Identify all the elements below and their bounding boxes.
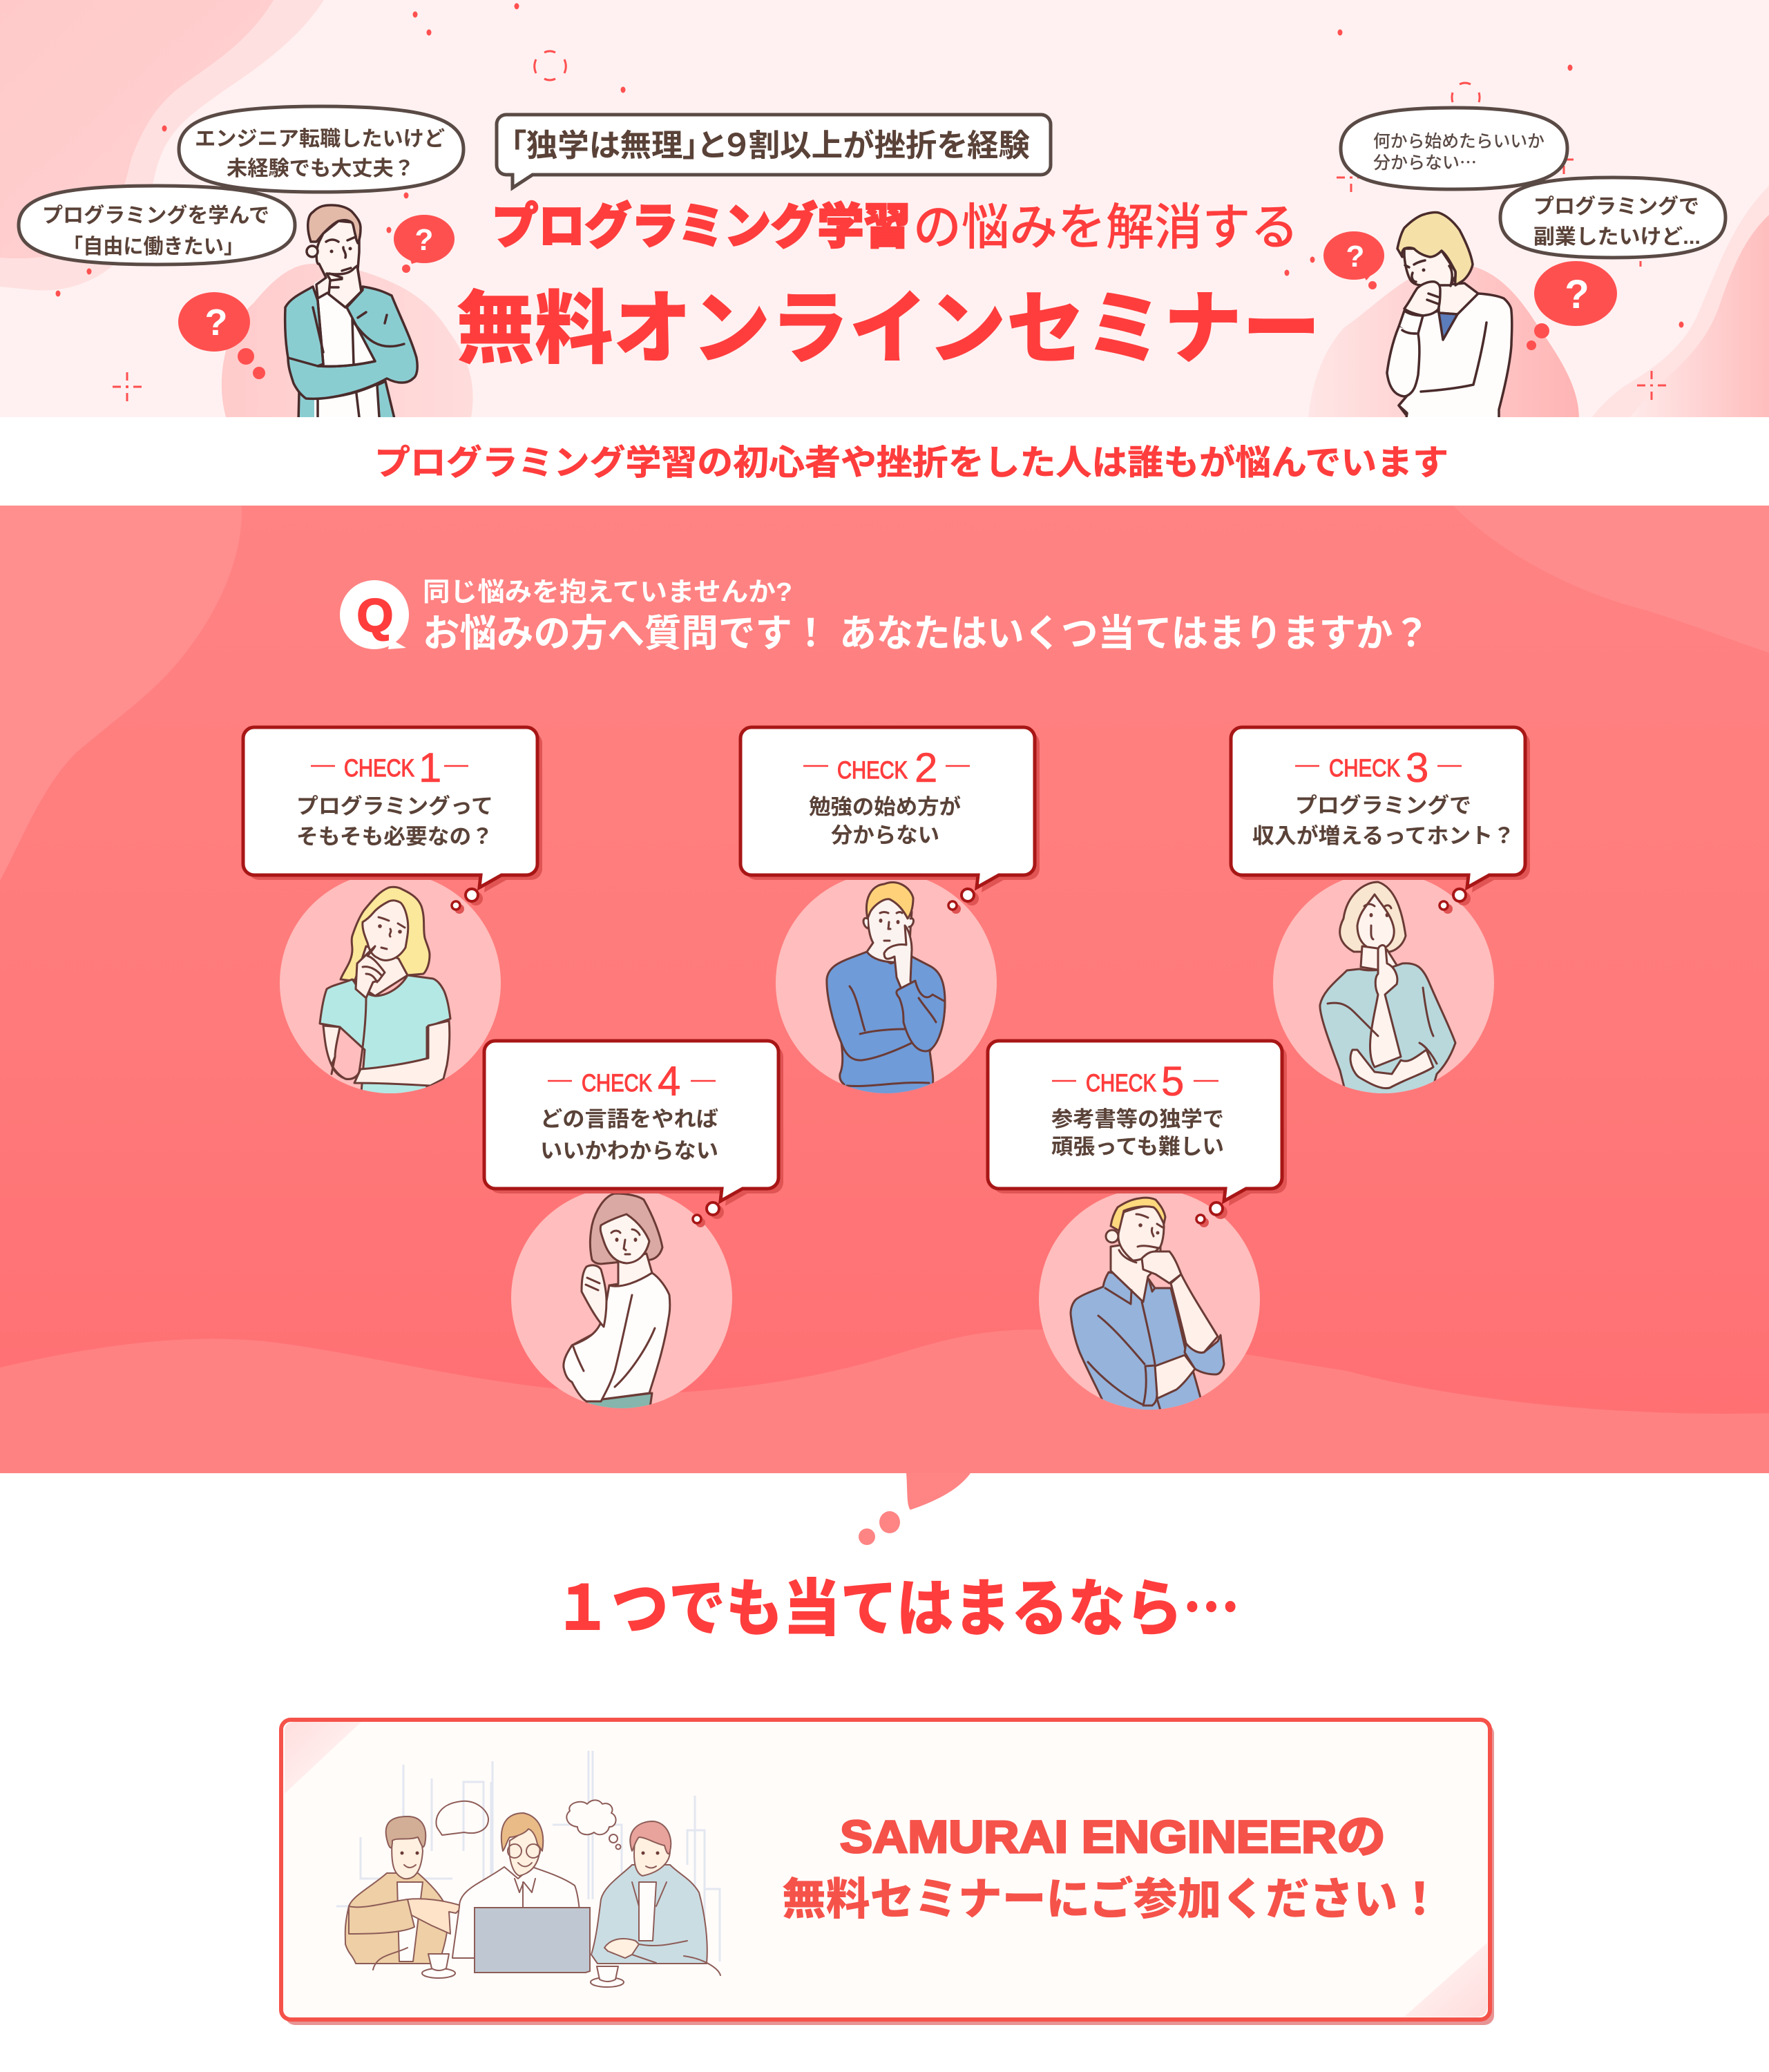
- callout: over 90 percent experienced frustration: [497, 115, 1051, 188]
- heading: question header: [340, 578, 1430, 655]
- check card 3: 3: [1406, 745, 1428, 791]
- circle: check 4 person background: [511, 1187, 732, 1408]
- check card 1: プログラミングって: [296, 794, 493, 818]
- callout: over 90 percent experienced frustration: 「独学は無理」と９割以上が挫折を経験: [510, 120, 1030, 165]
- check card 2: CHECK: [837, 757, 908, 784]
- check card 2: [740, 727, 1040, 914]
- speech bubble: work freely: 「自由に働きたい」: [63, 236, 244, 258]
- illustration: man in blue sweater: [827, 883, 945, 1098]
- check card 3: [1231, 727, 1530, 914]
- text: samurai engineer invitation: 無料セミナーにご参加ください！: [782, 1874, 1442, 1924]
- check card 1: [243, 727, 542, 914]
- circle: check 2 person background: [776, 872, 997, 1093]
- check card 1: そもそも必要なの？: [296, 825, 493, 849]
- person: middle in white shirt: [452, 1813, 584, 1958]
- cup right: [591, 1966, 624, 1987]
- speech bubble: side job: 副業したいけど...: [1533, 226, 1701, 249]
- text: samurai engineer invitation: SAMURAI ENGINEERの: [840, 1811, 1386, 1862]
- check card 2: 2: [915, 745, 937, 791]
- check card 5: 参考書等の独学で: [1051, 1107, 1224, 1131]
- heading: question header: 同じ悩みを抱えていませんか?: [423, 578, 792, 607]
- icon: speech balloon: [436, 1801, 488, 1835]
- icon: Q bubble: [340, 580, 409, 649]
- cup left: [422, 1954, 455, 1978]
- person: left in beige jacket: [345, 1816, 463, 1964]
- speech bubble: career change: 未経験でも大丈夫？: [227, 157, 414, 180]
- title: free online seminar: 無料オンラインセミナー: [456, 284, 1321, 374]
- title: programming learning worries: の悩みを解消する: [913, 200, 1299, 256]
- panel: seminar invitation: [281, 1720, 1494, 2025]
- illustration: woman with blue grey sweater: [1320, 882, 1455, 1098]
- circle: check 1 person background: [280, 872, 501, 1093]
- laptop: [475, 1908, 590, 1973]
- speech bubble: where to start: [1341, 108, 1567, 189]
- speech bubble: where to start: 何から始めたらいいか: [1373, 132, 1545, 151]
- heading: question header: お悩みの方へ質問です！ あなたはいくつ当てはまりますか？: [423, 612, 1430, 655]
- icon: question bubble small right: [1323, 231, 1384, 289]
- speech bubble: side job: プログラミングで: [1533, 195, 1699, 218]
- check card 3: プログラミングで: [1295, 794, 1471, 818]
- check card 2: 勉強の始め方が: [809, 795, 961, 819]
- speech bubble: side job: [1500, 178, 1725, 258]
- icon: Q bubble: Q: [357, 589, 393, 642]
- speech bubble: career change: [179, 106, 463, 192]
- illustration: woman with yellow hair: [320, 887, 450, 1105]
- icon: question bubble small left: [394, 215, 455, 273]
- icon: question bubble large right: [1527, 261, 1617, 350]
- speech bubble: work freely: [19, 186, 295, 265]
- check card 4: いいかわからない: [540, 1139, 718, 1163]
- panel: hero background: [0, 0, 1769, 417]
- circle: check 3 person background: [1273, 872, 1494, 1093]
- check card 4: 4: [658, 1058, 680, 1104]
- decorative dots and crosshairs: [55, 3, 1684, 401]
- check card 4: [484, 1041, 783, 1227]
- check card 4: どの言語をやれば: [540, 1107, 718, 1131]
- check card 3: 収入が増えるってホント？: [1252, 824, 1515, 848]
- icon: question bubble large right: ?: [1565, 272, 1589, 317]
- heading: if even one applies: １つでも当てはまるなら…: [554, 1558, 1240, 1648]
- check card 5: 5: [1161, 1058, 1184, 1104]
- subheading band: [0, 417, 1769, 506]
- title: programming learning worries: [492, 200, 1299, 256]
- check card 5: 頑張っても難しい: [1051, 1135, 1224, 1159]
- subheading band: プログラミング学習の初心者や挫折をした人は誰もが悩んでいます: [374, 443, 1448, 482]
- speech bubble: work freely: プログラミングを学んで: [42, 204, 269, 227]
- illustration: woman with brown hair: [564, 1193, 670, 1412]
- illustration: man in blue shirt with blond hair: [1071, 1198, 1224, 1416]
- icon: question bubble large left: [178, 292, 265, 379]
- icon: thought cloud: [566, 1800, 620, 1850]
- check card 4: CHECK: [582, 1070, 652, 1097]
- check card 1: 1: [419, 745, 441, 791]
- circle: check 5 person background: [1039, 1189, 1260, 1410]
- icon: question bubble small left: ?: [415, 223, 433, 257]
- panel: question section background: [0, 506, 1769, 1473]
- person: right in blue jacket: [591, 1821, 707, 1964]
- check card 1: CHECK: [344, 755, 414, 782]
- illustration: thinking man in teal jacket: [285, 205, 417, 421]
- check card 3: CHECK: [1329, 755, 1400, 782]
- check card 5: CHECK: [1086, 1070, 1156, 1097]
- check card 2: 分からない: [831, 823, 939, 847]
- illustration: three people around a laptop: [336, 1751, 720, 1987]
- speech bubble: career change: エンジニア転職したいけど: [195, 128, 445, 151]
- table: [373, 1948, 720, 1975]
- arrow: thought bubble tail under section: [859, 1473, 970, 1545]
- title: programming learning worries: プログラミング学習: [492, 200, 910, 253]
- icon: question bubble small right: ?: [1346, 240, 1364, 274]
- speech bubble: where to start: 分からない…: [1373, 149, 1477, 174]
- check card 5: [988, 1041, 1287, 1227]
- icon: question bubble large left: ?: [204, 302, 228, 343]
- illustration: thinking woman in white sweater: [1387, 213, 1512, 423]
- text: samurai engineer invitation: [782, 1811, 1442, 1924]
